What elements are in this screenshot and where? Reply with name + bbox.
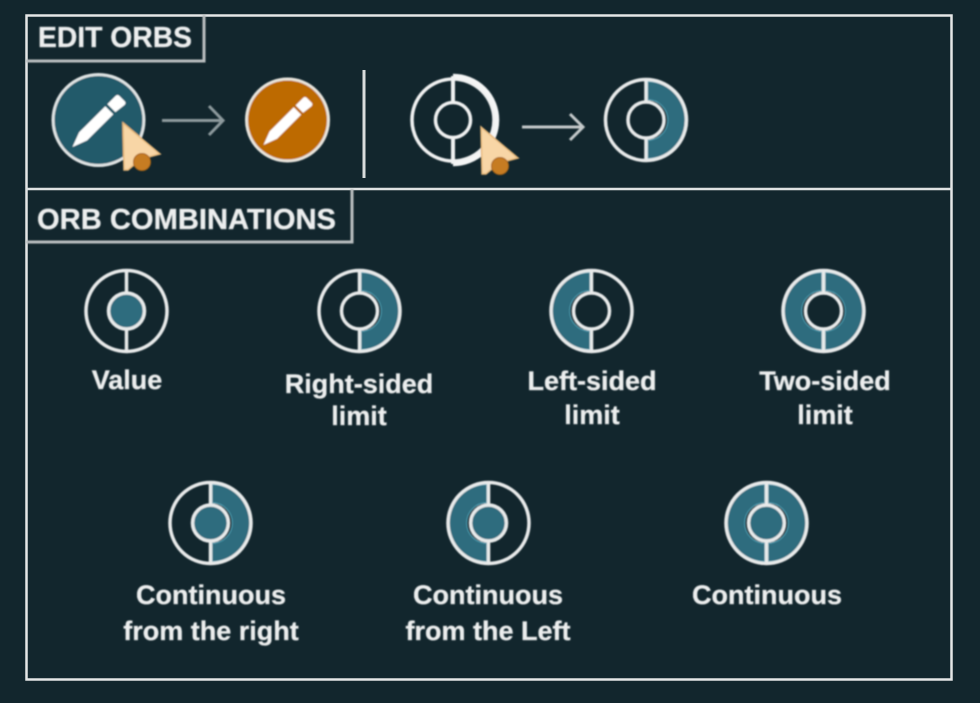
label: continuous from the left: from the Left [406,616,571,646]
panel: section divider [26,188,952,190]
label: right-sided limit: limit [331,401,387,431]
label: continuous from the right: Continuous [136,580,286,610]
orb: value [86,270,167,352]
divider: vertical [362,70,366,178]
heading: edit orbs: EDIT ORBS [38,22,192,54]
heading: edit orbs [26,15,204,61]
arrow: limit orb transition [522,114,583,140]
label: right-sided limit: Right-sided [285,369,433,399]
label: left-sided limit: Left-sided [527,366,657,396]
label: value: Value [92,365,162,395]
orb: right-sided limit [319,270,400,352]
orb: continuous from the right [170,482,251,564]
orb: continuous [726,482,807,564]
icon: teal edit orb with cursor [53,74,160,170]
label: two-sided limit: limit [797,400,853,430]
label: left-sided limit: limit [564,400,620,430]
label: continuous: Continuous [692,580,842,610]
arrow: edit orb transition [162,106,223,135]
label: continuous from the left: Continuous [413,580,563,610]
label: continuous from the right: from the right [123,616,299,646]
heading: orb combinations [26,189,352,242]
orb: two-sided limit [783,270,864,352]
icon: outline orb with cursor [412,76,518,174]
label: two-sided limit: Two-sided [759,366,891,396]
icon: right-sided result orb [606,80,686,160]
icon: orange edit orb [246,79,328,161]
orb: left-sided limit [551,270,632,352]
orb: continuous from the left [448,482,529,564]
heading: orb combinations: ORB COMBINATIONS [37,204,336,236]
